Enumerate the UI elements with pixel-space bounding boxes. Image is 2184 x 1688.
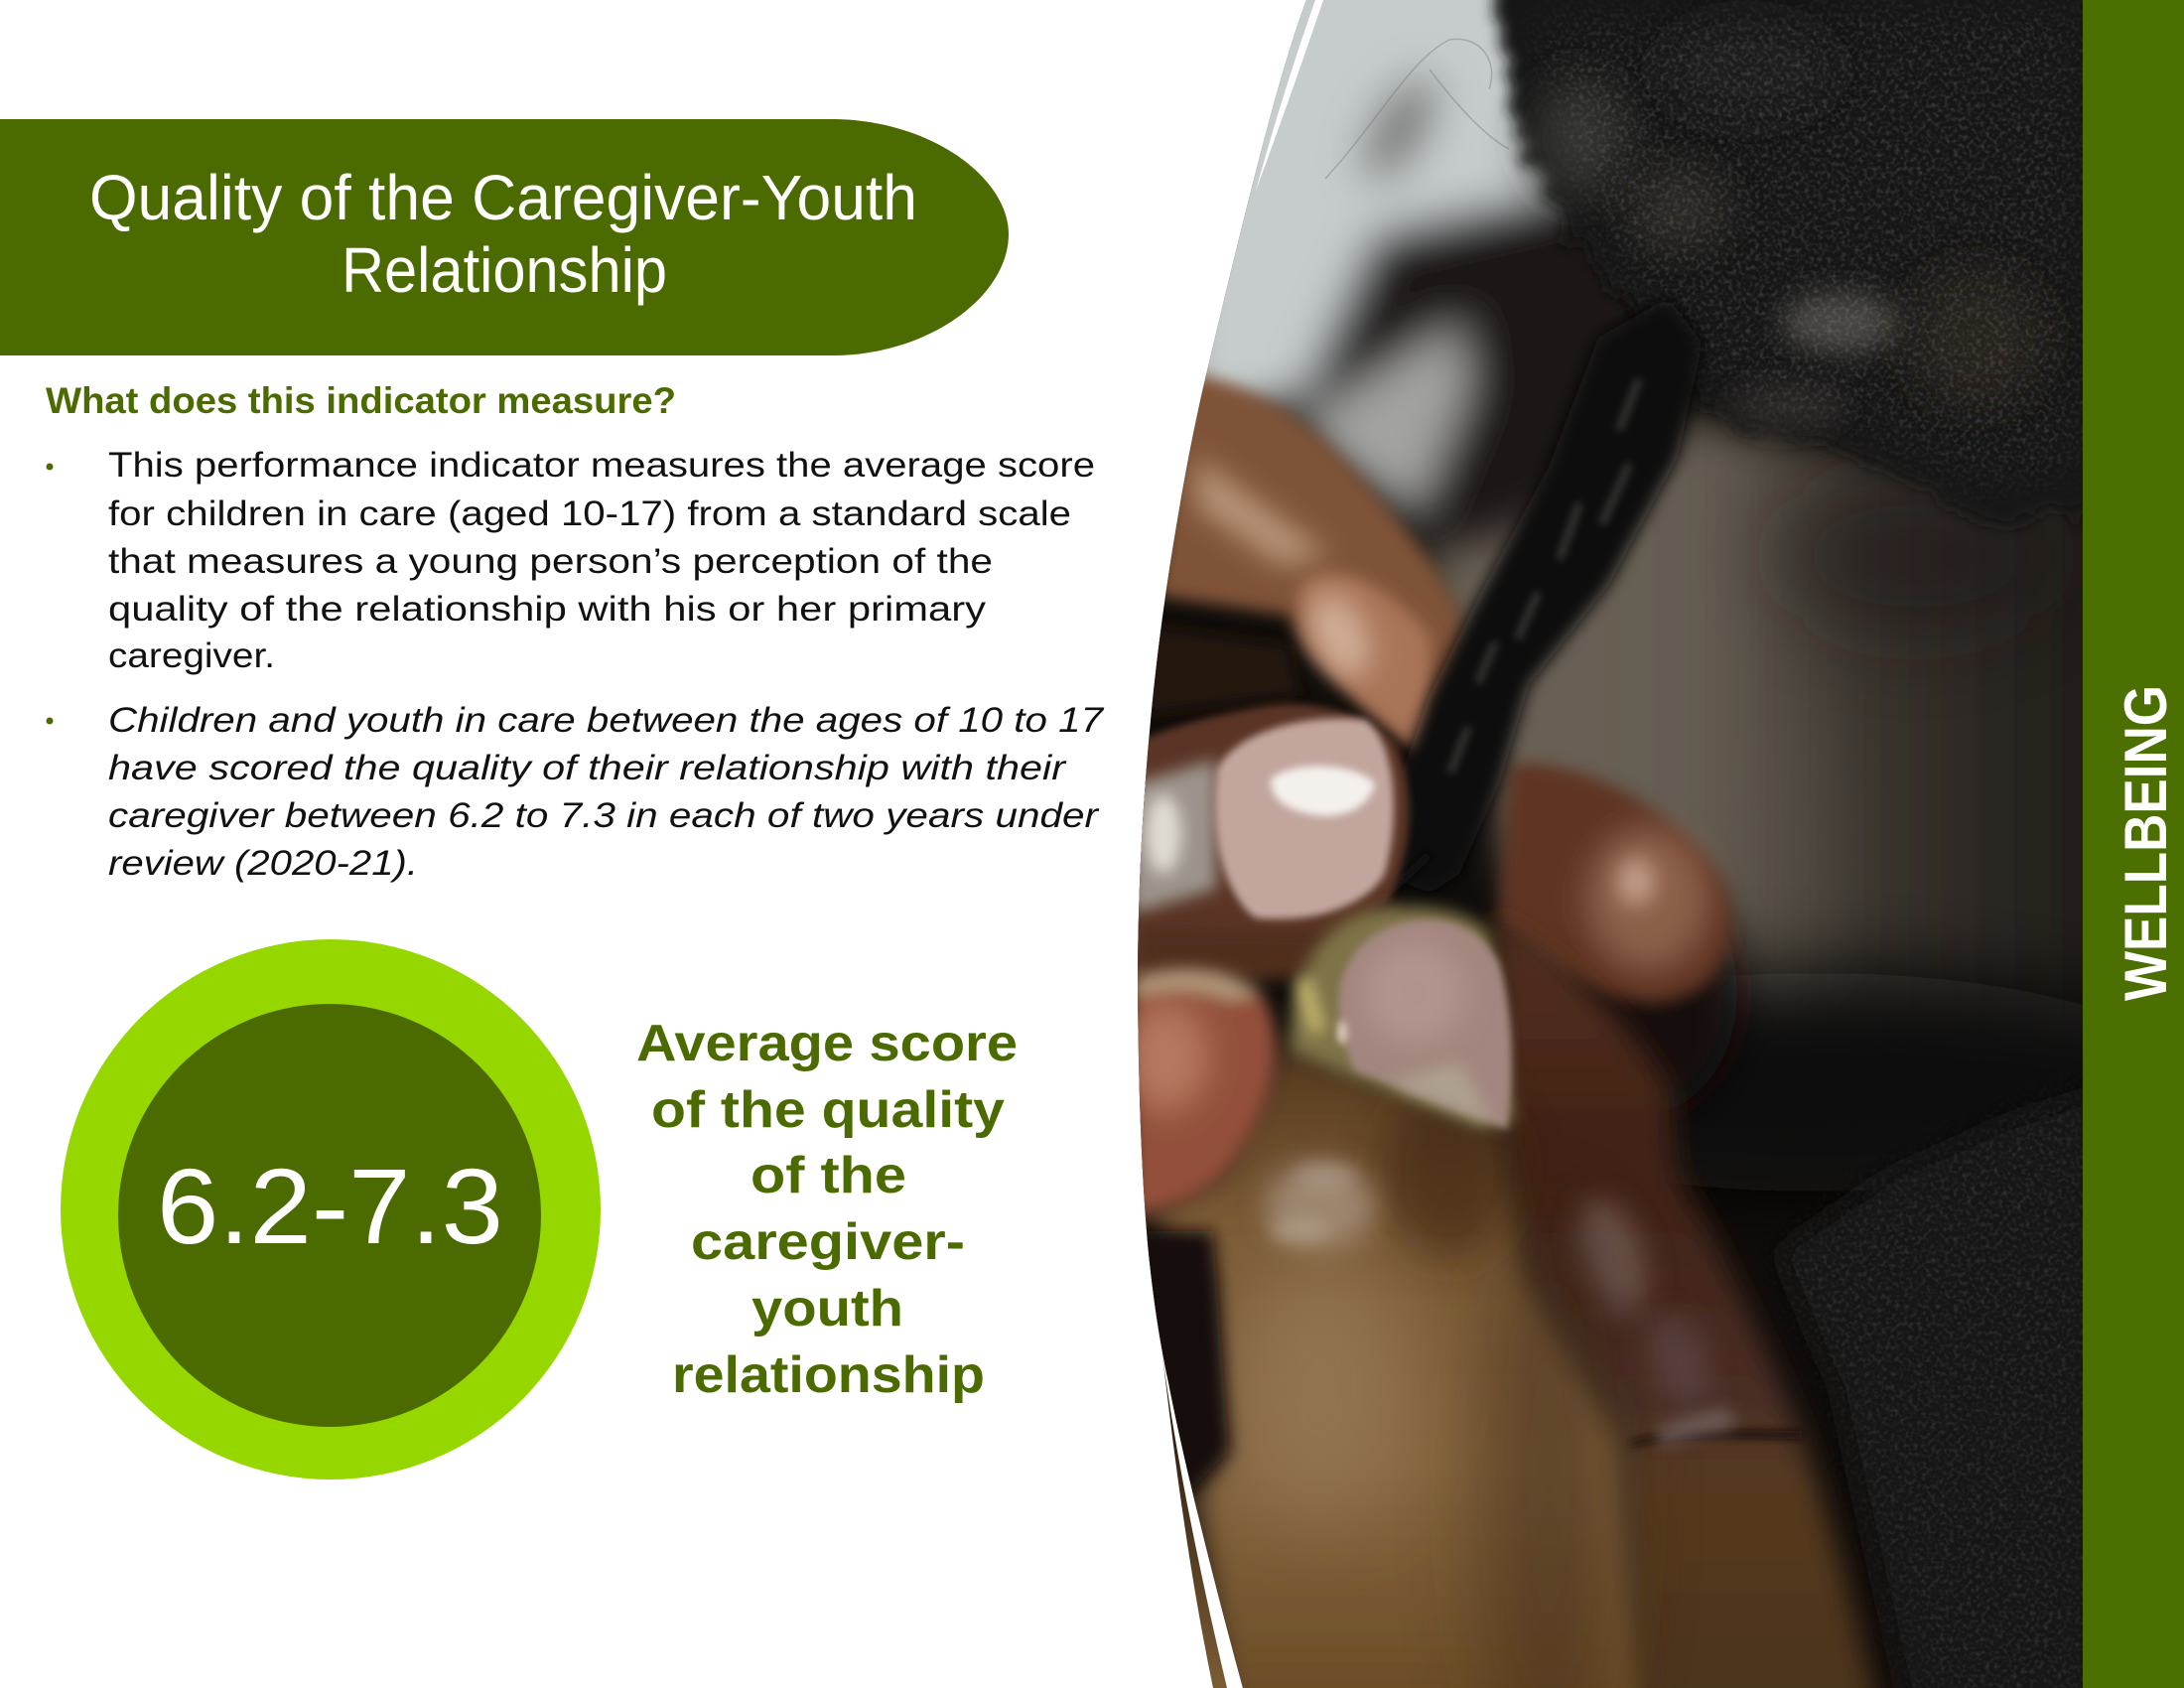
right band: WELLBEING: WELLBEING [2113, 685, 2179, 1001]
text block: score summary: have scored the quality of their relationship with their [108, 749, 1067, 787]
text block: indicator definition: This performance indicator measures the average score [108, 446, 1095, 485]
photo: hands braiding hair [1138, 0, 2083, 1688]
text block: indicator definition: quality of the relationship with his or her primary [108, 590, 987, 629]
large lower thumb [1132, 1043, 1652, 1688]
score circle [61, 939, 601, 1479]
caption: average score: relationship [672, 1346, 985, 1404]
right band: WELLBEING [2083, 0, 2184, 1688]
score circle: 6.2-7.3 [157, 1146, 503, 1266]
thumb with pearly nail [1132, 704, 1410, 993]
caption: average score [636, 1015, 1018, 1404]
white sliver, top of photo edge [1256, 0, 1323, 191]
caption: average score: of the quality [651, 1081, 1005, 1139]
title banner: Relationship [341, 234, 667, 306]
neck skin [1420, 403, 2083, 1055]
text block: score summary [46, 701, 1105, 883]
text block: score summary: Children and youth in care between the ages of 10 to 17 [108, 701, 1105, 740]
caption: average score: youth [751, 1280, 903, 1337]
text block: indicator definition [46, 446, 1095, 675]
caption: average score: Average score [636, 1015, 1018, 1072]
dark finger [1494, 918, 1886, 1688]
text block: indicator definition: that measures a young person’s perception of the [108, 542, 993, 581]
right fingertip [1499, 764, 1732, 1003]
red left fingertip [1125, 969, 1277, 1216]
title banner [0, 119, 1009, 355]
hair texture [1533, 0, 2083, 493]
text block: indicator definition: caregiver. [108, 636, 275, 675]
stray hair strands [1325, 39, 1509, 179]
heading: what does this indicator measure: What does this indicator measure? [46, 380, 676, 421]
hair mass [1489, 0, 2134, 516]
caption: average score: of the [751, 1147, 906, 1204]
blurred light background [1193, 0, 1626, 550]
text block: indicator definition: for children in care (aged 10-17) from a standard scale [108, 494, 1071, 533]
title banner: Quality of the Caregiver-Youth [89, 162, 917, 233]
caption: average score: caregiver- [691, 1213, 965, 1271]
center finger nail [1290, 907, 1514, 1129]
thin brown stripe, bottom of photo edge [1162, 1355, 1227, 1688]
braid [1310, 298, 1703, 958]
text block: score summary: review (2020-21). [108, 844, 418, 883]
sweater [1793, 1106, 2083, 1688]
top finger [1142, 372, 1463, 755]
text block: score summary: caregiver between 6.2 to 7.3 in each of two years under [108, 796, 1100, 835]
